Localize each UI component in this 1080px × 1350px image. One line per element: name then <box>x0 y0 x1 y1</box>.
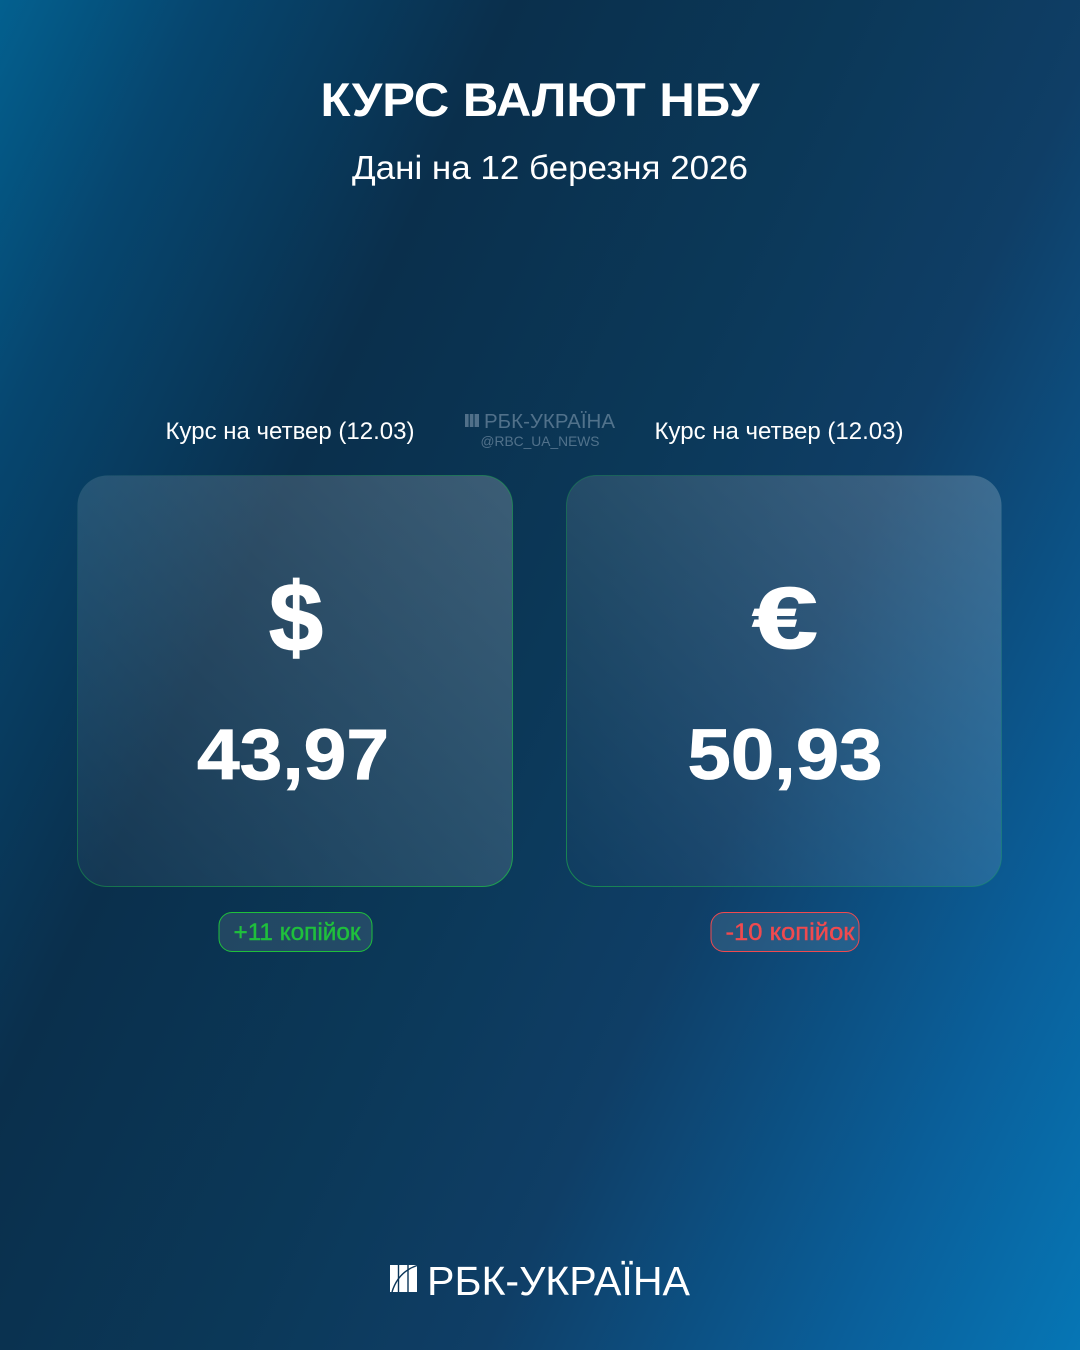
badge: dollar change: +11 копійок <box>234 919 361 946</box>
icon: logo mark <box>390 1265 417 1292</box>
subtitle: date: Дані на 12 березня 2026 <box>352 149 748 186</box>
watermark: @RBC_UA_NEWS <box>480 433 600 449</box>
badge: dollar change <box>219 912 372 952</box>
badge: euro change: -10 копійок <box>726 919 855 946</box>
panel: euro <box>566 476 1002 886</box>
value: euro rate: 50,93 <box>688 716 882 795</box>
watermark <box>465 411 616 449</box>
watermark: РБК-УКРАЇНА <box>484 411 616 433</box>
value: dollar rate: 43,97 <box>197 716 389 795</box>
badge: euro change <box>711 912 859 952</box>
label: euro rate date: Курс на четвер (12.03) <box>654 418 904 445</box>
icon: dollar sign: $ <box>269 563 323 672</box>
title: КУРС ВАЛЮТ НБУ <box>320 73 760 126</box>
icon: euro sign: € <box>752 570 818 667</box>
panel: dollar <box>78 476 512 886</box>
logo: RBC-Ukraine: РБК-УКРАЇНА <box>427 1258 691 1304</box>
label: dollar rate date: Курс на четвер (12.03) <box>166 418 414 445</box>
